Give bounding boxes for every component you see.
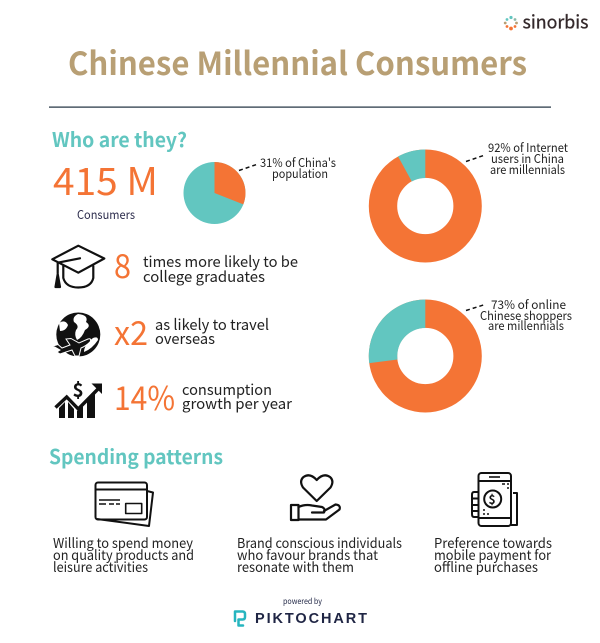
text: quality products: on quality products and bbox=[53, 544, 194, 564]
text: mobile payment: mobile payment for bbox=[434, 544, 552, 564]
footer: powered by piktochart bbox=[235, 596, 367, 627]
icon: globe and plane bbox=[53, 312, 100, 356]
stat: x2 travel bbox=[114, 307, 269, 355]
text: brand conscious: Brand conscious individuals bbox=[237, 532, 402, 552]
stat: 14% growth bbox=[114, 372, 292, 420]
heading: who are they: Who are they? bbox=[52, 124, 187, 153]
text: brand conscious bbox=[237, 532, 402, 576]
stat: 415 M consumers: 415 M bbox=[53, 151, 158, 206]
heading: spending patterns: Spending patterns bbox=[49, 441, 223, 470]
stat: 8 times more likely: times more likely to be bbox=[143, 251, 298, 272]
text: quality products: leisure activities bbox=[53, 556, 148, 576]
icon: mobile payment bbox=[472, 473, 517, 526]
stat: 8 times more likely: 8 bbox=[114, 240, 131, 288]
donut chart: 73% of online shoppers bbox=[369, 296, 572, 398]
donut chart: 92% of internet users: are millennials bbox=[490, 161, 565, 178]
icon: heart in hand bbox=[291, 475, 340, 520]
text: mobile payment bbox=[434, 532, 552, 576]
stat: x2 travel: overseas bbox=[155, 328, 215, 349]
footer: powered by piktochart: PIKTOCHART bbox=[255, 611, 367, 627]
donut chart: 92% of internet users: users in China bbox=[491, 150, 564, 167]
pie chart: 31% of population bbox=[184, 154, 336, 224]
donut chart: 73% of online shoppers: 73% of online bbox=[491, 296, 566, 313]
stat: 8 times more likely: college graduates bbox=[143, 266, 265, 287]
text: brand conscious: resonate with them bbox=[237, 556, 354, 576]
text: brand conscious: who favour brands that bbox=[237, 544, 378, 564]
title: Chinese Millennial Consumers bbox=[68, 39, 527, 85]
pie chart: 31% of population: population bbox=[272, 165, 328, 182]
footer: powered by piktochart: powered by bbox=[283, 596, 323, 607]
icon: growth chart bbox=[56, 376, 102, 418]
donut chart: 73% of online shoppers: are millennials bbox=[488, 317, 564, 334]
donut chart: 73% of online shoppers: Chinese shoppers bbox=[480, 307, 572, 324]
stat: 8 times more likely bbox=[114, 240, 298, 288]
icon: credit cards bbox=[96, 482, 153, 526]
stat: 14% growth: consumption bbox=[182, 379, 272, 400]
stat: x2 travel: as likely to travel bbox=[155, 314, 269, 335]
stat: 14% growth: 14% bbox=[114, 372, 175, 420]
icon: mobile payment: $ bbox=[488, 491, 496, 508]
stat: 415 M consumers: Consumers bbox=[77, 206, 135, 223]
logo: sinorbis: sinorbis bbox=[522, 8, 588, 34]
text: mobile payment: offline purchases bbox=[434, 556, 538, 576]
text: quality products bbox=[53, 532, 194, 576]
donut chart: 92% of internet users bbox=[383, 139, 568, 248]
stat: 14% growth: growth per year bbox=[182, 393, 292, 414]
text: quality products: Willing to spend money bbox=[53, 532, 193, 552]
donut chart: 92% of internet users: 92% of Internet bbox=[488, 139, 568, 156]
text: mobile payment: Preference towards bbox=[434, 532, 552, 552]
icon: growth chart: $ bbox=[72, 376, 84, 403]
icon: graduation cap bbox=[52, 246, 104, 288]
stat: x2 travel: x2 bbox=[114, 307, 148, 355]
pie chart: 31% of population: 31% of China's bbox=[260, 154, 336, 171]
